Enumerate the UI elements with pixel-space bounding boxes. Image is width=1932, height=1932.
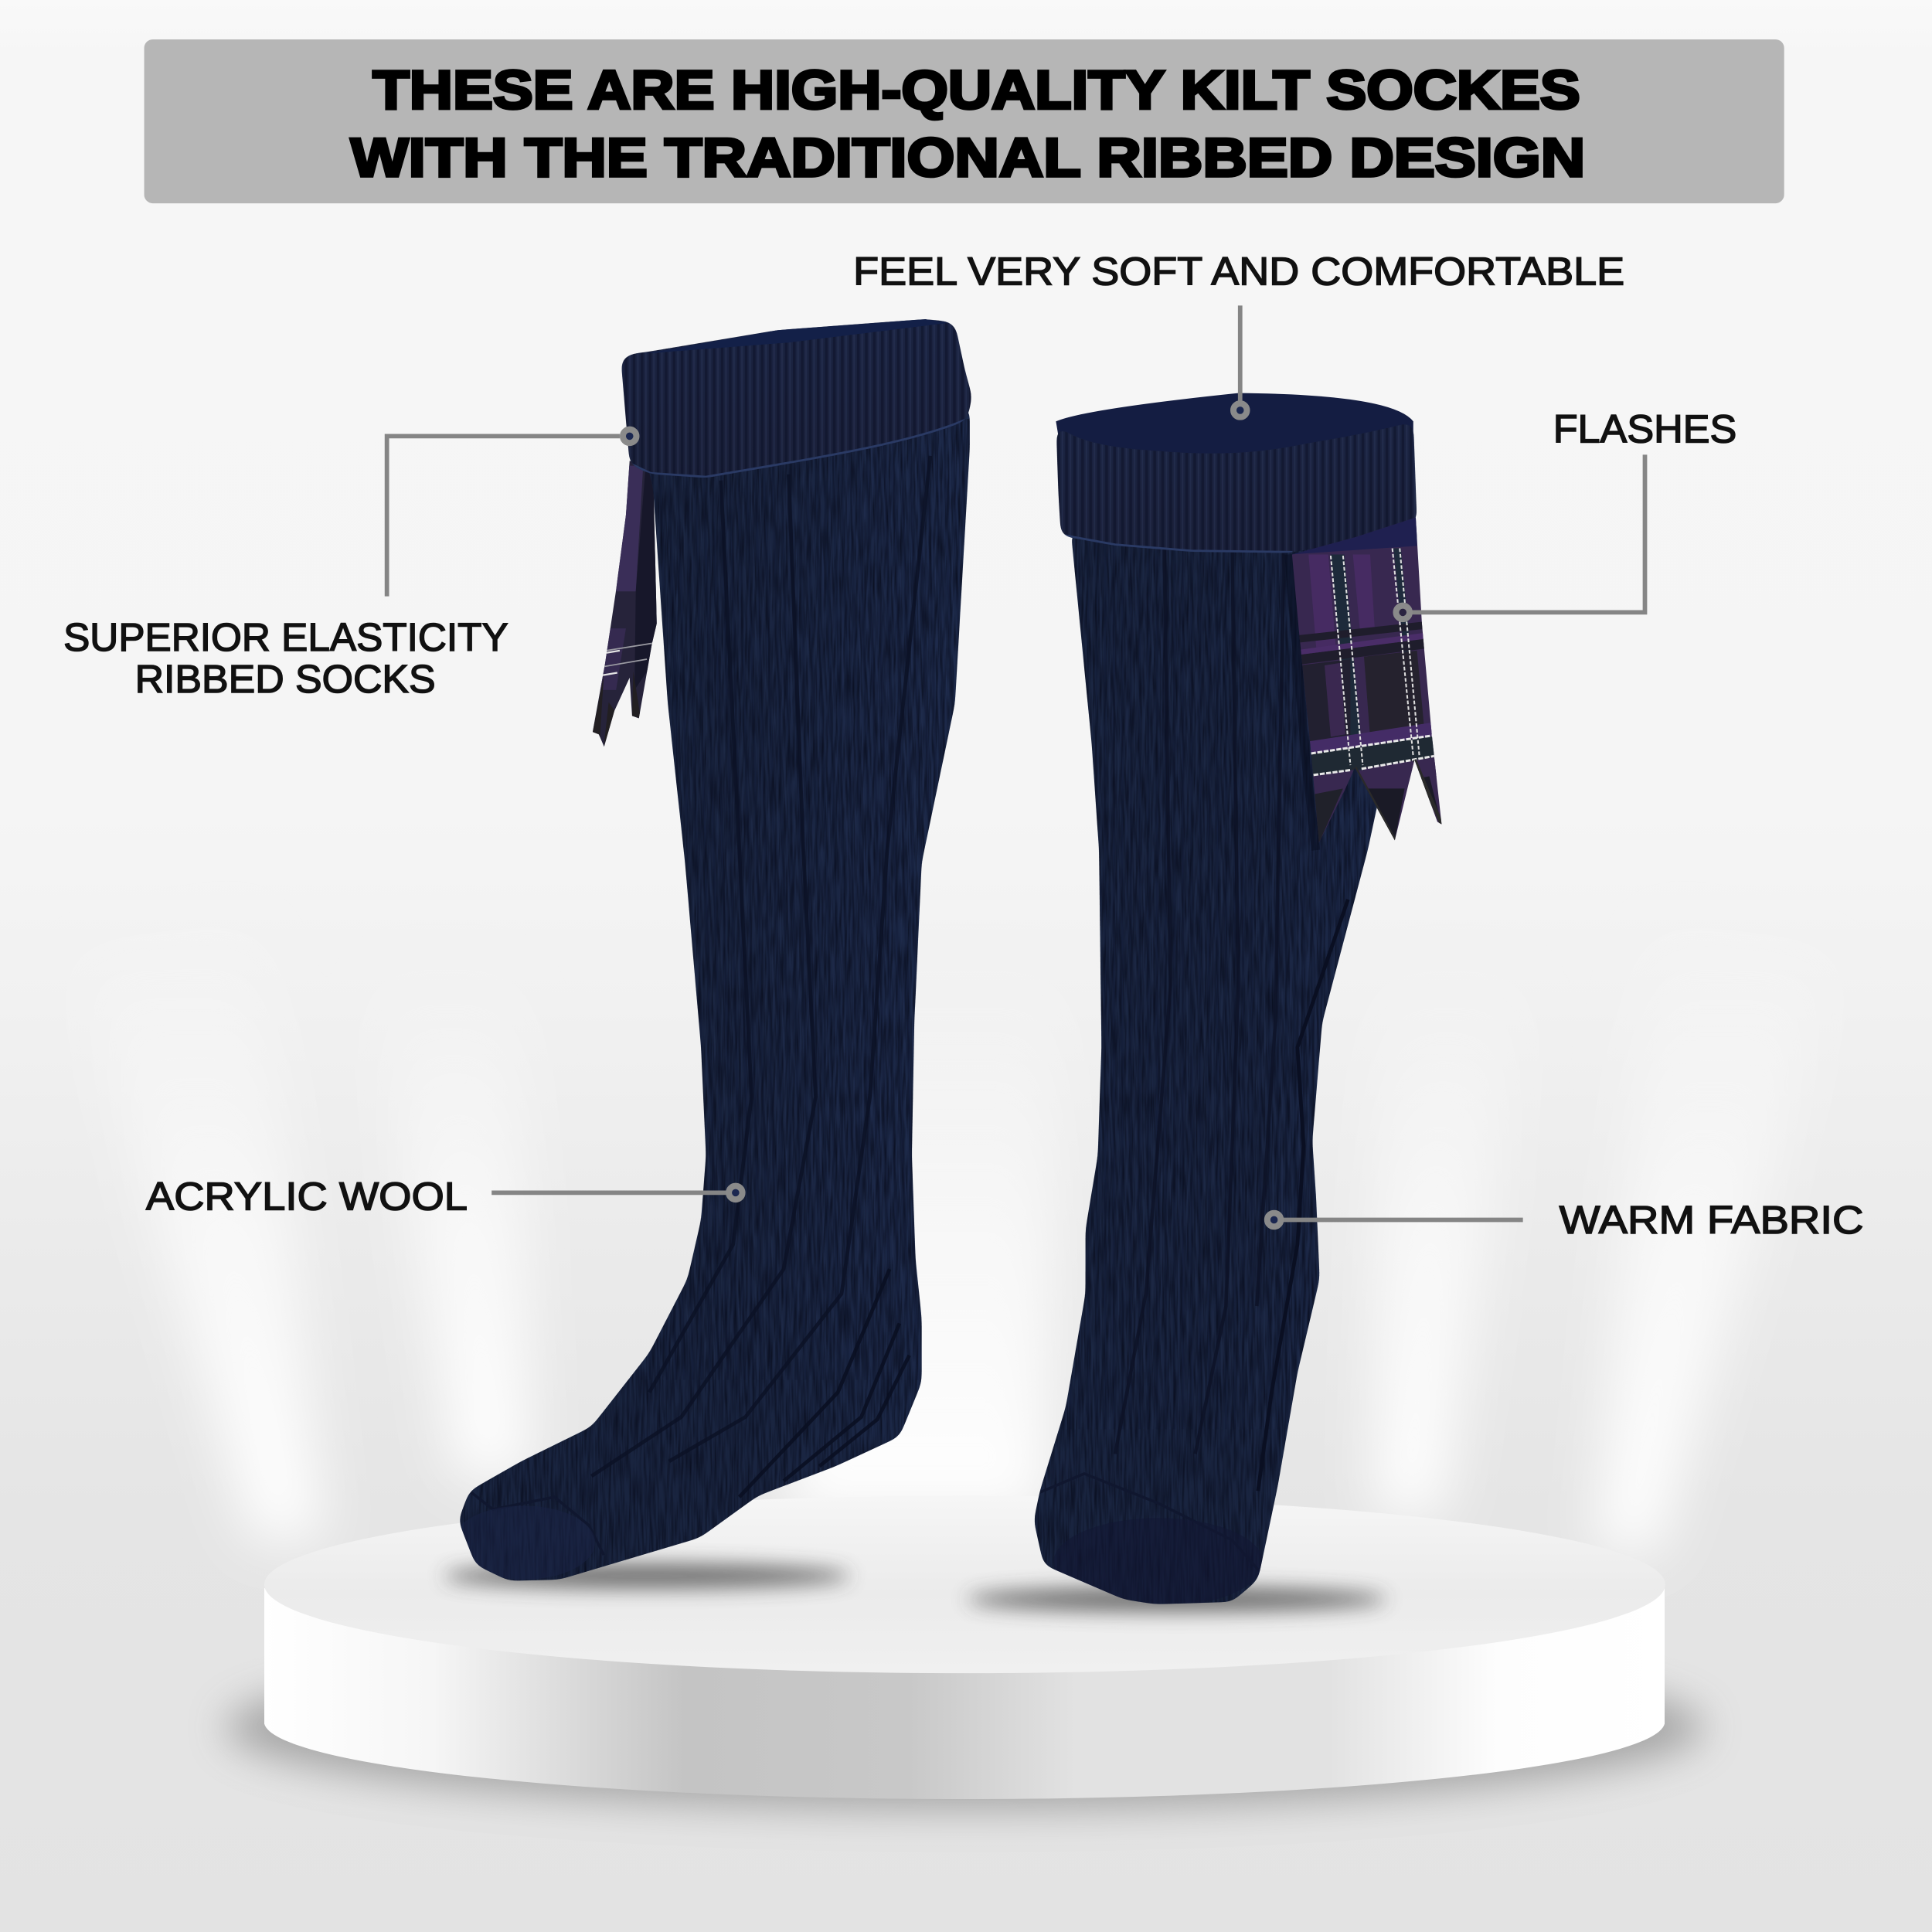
callout: superior elasticity — [63, 430, 637, 701]
callout: acrylic wool — [146, 1175, 743, 1219]
callout: warm fabric — [1267, 1198, 1864, 1242]
right sock — [1022, 393, 1441, 1614]
left sock inner opening — [645, 319, 949, 354]
callout: flashes — [1396, 406, 1736, 619]
label line 1: SUPERIOR ELASTICITY — [63, 615, 509, 659]
left sock cuff — [621, 319, 972, 478]
leader line — [387, 436, 620, 597]
marker dot — [1396, 606, 1410, 619]
shadow under left sock — [444, 1563, 850, 1588]
podium side — [264, 1588, 1665, 1799]
podium top surface — [264, 1496, 1665, 1673]
label: WARM FABRIC — [1560, 1198, 1864, 1242]
right sock inner opening — [1056, 393, 1413, 466]
label: FLASHES — [1553, 406, 1736, 451]
left sock — [450, 319, 986, 1590]
title line 2: WITH THE TRADITIONAL RIBBED DESIGN — [351, 128, 1585, 189]
podium ground shadow — [226, 1646, 1704, 1809]
leader line — [1283, 1219, 1523, 1221]
podium — [226, 1496, 1704, 1809]
header banner — [145, 39, 1784, 203]
label: ACRYLIC WOOL — [146, 1175, 468, 1219]
folded top band — [1291, 515, 1417, 554]
right flash — [1291, 515, 1441, 843]
right sock cuff — [1056, 421, 1417, 552]
right sock leg — [1034, 538, 1377, 1604]
leader line — [492, 1192, 727, 1194]
leader line — [1412, 454, 1645, 612]
marker dot — [1267, 1213, 1281, 1226]
label line 2: RIBBED SOCKS — [135, 657, 436, 701]
callout: feel very soft and comfortable — [853, 249, 1624, 417]
marker dot — [1233, 403, 1247, 417]
banner panel — [145, 39, 1784, 203]
leader line — [1239, 305, 1242, 402]
left flash — [593, 461, 659, 747]
left sock leg — [450, 406, 986, 1590]
marker dot — [623, 430, 637, 443]
shadow under right sock — [968, 1587, 1386, 1611]
marker dot — [729, 1186, 743, 1199]
title line 1: THESE ARE HIGH-QUALITY KILT SOCKES — [372, 60, 1580, 121]
label: FEEL VERY SOFT AND COMFORTABLE — [853, 249, 1624, 293]
